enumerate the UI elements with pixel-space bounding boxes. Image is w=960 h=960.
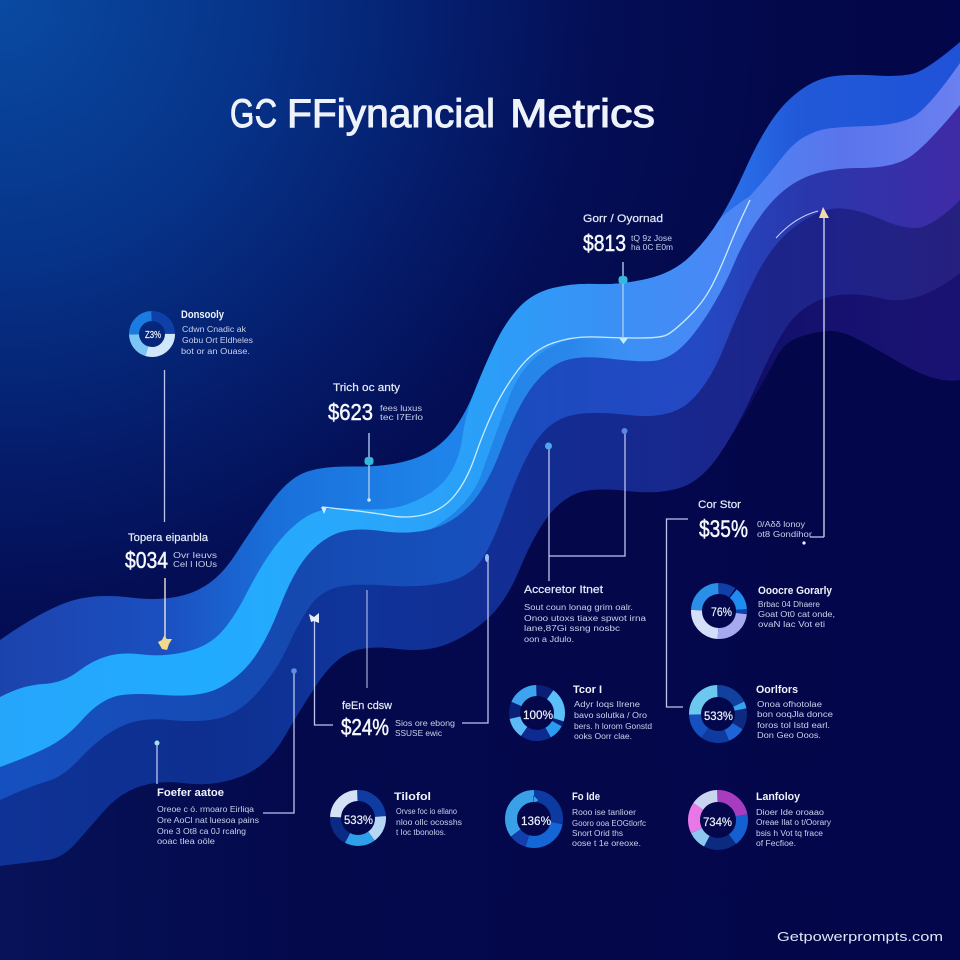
title: GC <box>230 92 277 136</box>
donut chart <box>695 691 741 737</box>
connector: arrow to star marker <box>158 578 172 650</box>
text block: Acceletor Itnet <box>524 584 647 644</box>
stat: Donsooly donut block <box>134 309 253 356</box>
stat: Donsooly donut block: Cdwn Cnadic ak <box>182 325 247 334</box>
stat: 533% donut block: foros tol Istd earl. <box>757 721 830 730</box>
stat: $034: Cel I IOUs <box>173 560 217 569</box>
text block: Foeler aatoe <box>157 787 259 846</box>
stat: 734% donut block: bsis h Vot tq frace <box>756 829 824 838</box>
stat: $35%: Cor Stor <box>698 499 741 511</box>
stat: $813: Gorr / Oyornad <box>583 213 663 225</box>
text block: Foeler aatoe: Ore AoCl nat luesoa pains <box>157 816 259 825</box>
stat: 734% donut block: 734% <box>703 815 732 829</box>
stat: $034: Ovr Ieuvs <box>173 551 217 560</box>
connector: teal marker, $813 <box>618 262 628 338</box>
donut chart <box>696 588 742 634</box>
stat: 533% donut block: 533% <box>704 709 733 723</box>
stat: 76% donut block: Goat Ot0 cat onde, <box>758 610 835 619</box>
stat: 734% donut block <box>694 791 831 848</box>
stat: $813: ha 0C E0m <box>631 243 673 252</box>
stat: 136% donut block: 136% <box>521 814 551 828</box>
stat: 136% donut block: Rooo ise tanlioer <box>572 808 636 817</box>
stat: $24%: SSUSE ewic <box>395 729 442 738</box>
stat: lower 533% donut block: Orvse foc io ellano <box>396 807 457 816</box>
stat: 136% donut block: oose t 1e oreoxe. <box>572 839 641 848</box>
title <box>230 92 655 136</box>
stat: 136% donut block: Gooro ooa EOGtlorfc <box>572 819 646 828</box>
stat: lower 533% donut block: 533% <box>344 813 373 827</box>
stat: $35% <box>698 499 812 543</box>
stat: $623: $623 <box>328 399 373 425</box>
stat: 734% donut block: Dioer Ide oroaao <box>756 808 825 817</box>
stat: $623 <box>328 382 424 425</box>
stat: 100% donut block: 100% <box>523 708 553 722</box>
stat: $034 <box>125 532 217 573</box>
stat: $623: Trich oc anty <box>333 382 401 394</box>
title: Metrics <box>510 92 655 136</box>
stat: $813 <box>583 213 673 256</box>
stat: Donsooly donut block: Z3% <box>145 330 161 341</box>
wave layer: page-dark base <box>0 331 960 960</box>
stat: 734% donut block: Oreae Ilat o t/Oorary <box>756 818 831 827</box>
text block: Foeler aatoe: ooac tlea oöle <box>157 837 216 846</box>
connector: bracket above text block <box>545 428 628 581</box>
stat: $35%: $35% <box>699 516 748 543</box>
connector: right bracket of $24% <box>462 554 489 723</box>
stat: $813: tQ 9z Jose <box>631 234 673 243</box>
stat: 100% donut block: bers. h lorom Gonstd <box>574 722 652 731</box>
donut chart <box>694 796 742 844</box>
text block: Acceletor Itnet: Onoo utoxs tiaxe spwot irna <box>524 614 647 623</box>
stat: lower 533% donut block <box>336 791 462 840</box>
stat: 533% donut block: bon ooqJla donce <box>757 710 834 719</box>
stat: 136% donut block: Snort Orid ths <box>572 829 623 838</box>
stat: 533% donut block: Don Geo Ooos. <box>757 731 821 740</box>
stat: 76% donut block: 76% <box>711 605 732 619</box>
donut chart <box>134 316 170 352</box>
connector: flag line to $24% <box>309 613 333 725</box>
donut chart <box>336 796 380 840</box>
stat: Donsooly donut block: Gobu Ort Eldheles <box>182 336 253 345</box>
stat: 100% donut block: Tcor I <box>573 684 602 696</box>
stat: lower 533% donut block: nloo ollc ocosshs <box>396 818 462 827</box>
text block: Acceletor Itnet: Acceretor Itnet <box>524 584 603 596</box>
stat: $35%: 0/Aδδ lonoy <box>757 520 805 529</box>
stat: 76% donut block: Ooocre Gorarly <box>758 585 833 597</box>
stat: Donsooly donut block: bot or an Ouase. <box>181 347 250 356</box>
stat: 100% donut block: ooks Oorr clae. <box>574 732 632 741</box>
stat: $623: tec I7Erlo <box>380 413 424 422</box>
stat: lower 533% donut block: Tilofol <box>394 791 431 803</box>
stat: Donsooly donut block: Donsooly <box>181 309 225 321</box>
wave layer: deep indigo band <box>0 273 960 960</box>
stat: 533% donut block: Oorlfors <box>756 684 798 696</box>
trend line with tick marks <box>321 200 750 517</box>
connector: bracket from $35% to donut <box>666 519 688 707</box>
text block: Acceletor Itnet: lane,87Gi ssng nosbc <box>524 624 620 633</box>
stat: 136% donut block: Fo Ide <box>572 791 600 803</box>
stat: 734% donut block: Lanfoloy <box>756 791 801 803</box>
watermark: Getpowerprompts.com <box>777 929 943 944</box>
text block: Foeler aatoe: Foefer aatoe <box>157 787 224 799</box>
stat: 100% donut block <box>514 684 652 741</box>
donut chart <box>514 690 560 736</box>
stat: $24% <box>341 700 455 740</box>
connector: line to text block lower left <box>263 668 297 813</box>
stat: 76% donut block: Brbac 04 Dhaere <box>758 600 821 609</box>
stat: 734% donut block: of Fecfioe. <box>756 839 796 848</box>
stat: 533% donut block <box>695 684 834 740</box>
connector: tall arrow to the top right <box>776 207 829 545</box>
stat: $24%: Sios ore ebong <box>395 719 455 728</box>
connector: top left vertical line <box>164 370 166 522</box>
stat: 76% donut block <box>696 585 835 634</box>
stat: 76% donut block: ovaN lac Vot eti <box>758 620 825 629</box>
wave layer: dark blue band <box>0 200 960 960</box>
text block: Acceletor Itnet: Sout coun lonag grim oalr. <box>524 603 633 612</box>
stat: 533% donut block: Onoa ofhotolae <box>757 700 823 709</box>
stat: 100% donut block: bavo solutka / Oro <box>574 711 648 720</box>
stat: $034: $034 <box>125 547 168 573</box>
stat: $24%: $24% <box>341 714 389 740</box>
stat: $813: $813 <box>583 230 626 256</box>
connector: vertical line above $24% <box>366 590 368 688</box>
stat: $623: fees luxus <box>380 404 422 413</box>
text block: Foeler aatoe: Oreoe c ó. rmoaro Eirliqa <box>157 805 255 814</box>
connector: short dot line <box>154 740 160 784</box>
connector: teal marker, $623 <box>364 433 374 502</box>
stat: $034: Topera eipanbla <box>128 532 209 544</box>
text block: Acceletor Itnet: oon a Jdulo. <box>524 635 574 644</box>
stat: 136% donut block <box>511 791 646 848</box>
text block: Foeler aatoe: One 3 Ot8 ca 0J rcalng <box>157 827 246 836</box>
title: FFiynancial <box>287 92 495 136</box>
donut chart <box>511 796 557 842</box>
stat: 100% donut block: Adyr Ioqs Ilrene <box>574 700 641 709</box>
stat: $35%: ot8 Gondihor <box>757 530 812 539</box>
wave layer: mid-tone inner band <box>425 338 680 560</box>
stat: $24%: feEn cdsw <box>342 700 392 712</box>
stat: lower 533% donut block: t Ioc tbonolos. <box>396 828 446 837</box>
